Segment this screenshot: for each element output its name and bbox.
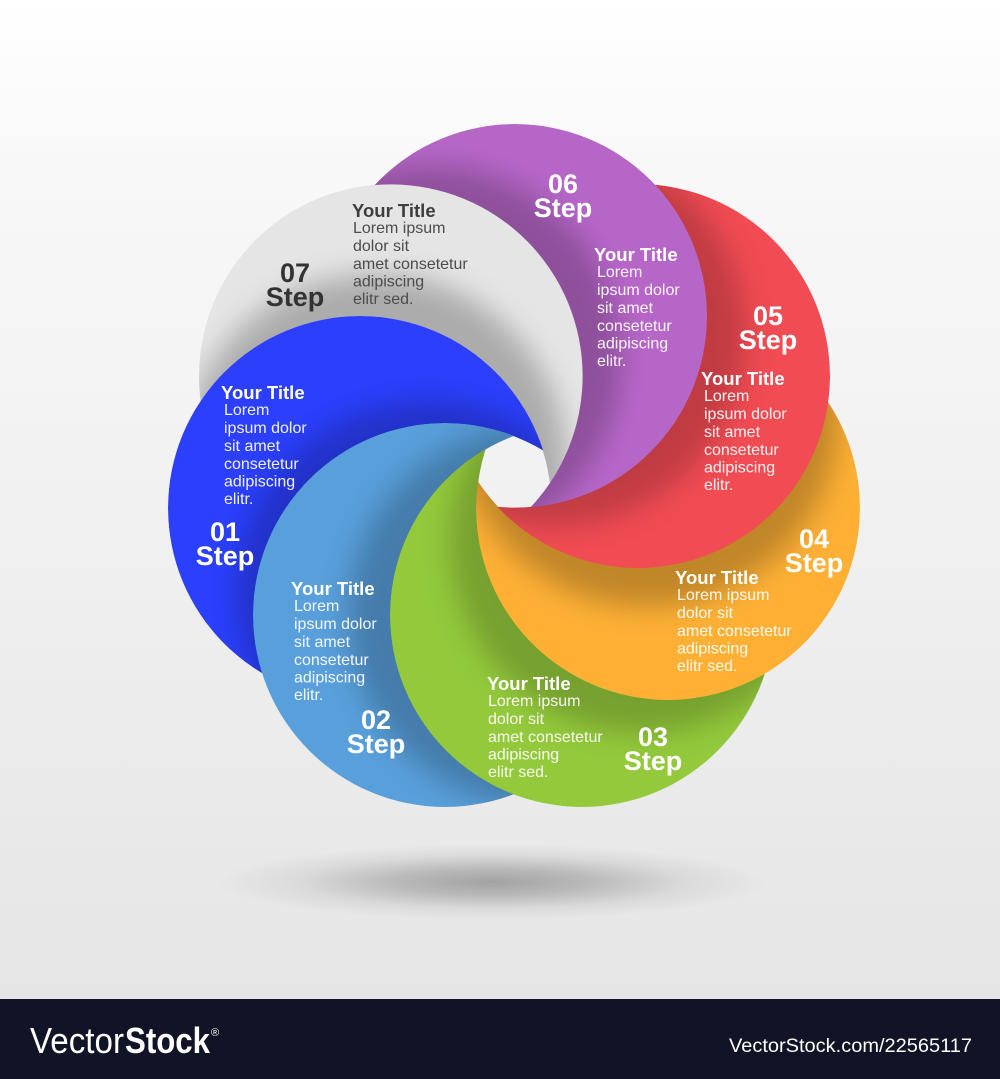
body text 06: adipiscing	[597, 336, 668, 352]
crescent: blue	[168, 316, 543, 674]
panel: step 02	[253, 423, 514, 807]
body text 02: Lorem	[294, 598, 339, 615]
step number 03: Step	[624, 746, 682, 776]
body text 02: ipsum dolor	[294, 616, 377, 633]
ground shadow	[217, 844, 767, 920]
image id: VectorStock.com/22565117	[729, 1035, 972, 1057]
body text 05: adipiscing	[704, 460, 775, 476]
step number 06: Step	[534, 193, 592, 223]
crescent: grey	[199, 184, 582, 483]
panel: step 01	[168, 316, 543, 674]
body text 03: adipiscing	[488, 746, 559, 764]
body text 05: ipsum dolor	[704, 406, 787, 423]
body text 06: sit amet	[597, 300, 654, 317]
title 04: Your Title	[675, 567, 759, 588]
body text 07: dolor sit	[353, 238, 410, 255]
body text 01: ipsum dolor	[224, 420, 307, 437]
logo wordmark: Vector	[30, 1020, 124, 1061]
title 03: Your Title	[487, 673, 571, 694]
body text 07: amet consetetur	[353, 256, 468, 273]
body text 03: elitr sed.	[488, 764, 548, 781]
panel: step 06	[374, 124, 707, 508]
body text 04: adipiscing	[677, 640, 748, 658]
body text 03: dolor sit	[488, 711, 545, 728]
panel: step 03	[390, 449, 765, 807]
title 07: Your Title	[352, 200, 436, 221]
step number 05: 05	[753, 301, 783, 331]
body text 01: Lorem	[224, 402, 269, 419]
panel: step 07	[199, 184, 582, 483]
step number 03: 03	[638, 722, 668, 752]
body text 02: elitr.	[294, 687, 323, 704]
panel: step 04	[476, 402, 860, 700]
step number 06: 06	[548, 169, 578, 199]
body text 02: adipiscing	[294, 670, 365, 686]
body text 07: elitr sed.	[353, 291, 413, 308]
title 05: Your Title	[701, 368, 785, 389]
step number 02: 02	[361, 705, 391, 735]
body text 02: consetetur	[294, 652, 369, 669]
body text 05: sit amet	[704, 424, 761, 441]
body text 06: elitr.	[597, 353, 626, 370]
footer bar	[0, 999, 1000, 1079]
body text 03: amet consetetur	[488, 729, 603, 746]
step number 01: Step	[196, 541, 254, 571]
body text 04: elitr sed.	[677, 658, 737, 675]
body text 06: consetetur	[597, 318, 672, 335]
step number 04: 04	[799, 524, 829, 554]
crescent: light blue	[253, 423, 514, 807]
body text 07: adipiscing	[353, 274, 424, 290]
body text 05: consetetur	[704, 442, 779, 459]
body text 07: Lorem ipsum	[353, 220, 445, 237]
logo wordmark: ®	[211, 1027, 219, 1039]
step number 01: 01	[210, 517, 240, 547]
step number 04: Step	[785, 548, 843, 578]
step number 05: Step	[739, 325, 797, 355]
panel: step 05	[498, 184, 830, 568]
body text 06: Lorem	[597, 264, 642, 281]
body text 04: amet consetetur	[677, 623, 792, 640]
body text 05: elitr.	[704, 477, 733, 494]
body text 01: consetetur	[224, 456, 299, 473]
title 02: Your Title	[291, 578, 375, 599]
body text 01: sit amet	[224, 438, 281, 455]
body text 04: Lorem ipsum	[677, 587, 769, 604]
body text 03: Lorem ipsum	[488, 693, 580, 710]
body text 04: dolor sit	[677, 605, 734, 622]
body text 01: elitr.	[224, 491, 253, 508]
body text 06: ipsum dolor	[597, 282, 680, 299]
title 01: Your Title	[221, 382, 305, 403]
step number 02: Step	[347, 729, 405, 759]
crescent: orange	[476, 402, 860, 700]
body text 05: Lorem	[704, 388, 749, 405]
crescent: red	[498, 184, 830, 568]
crescent: purple	[374, 124, 707, 508]
crescent: green	[390, 449, 765, 807]
body text 02: sit amet	[294, 634, 351, 651]
step number 07: Step	[266, 282, 324, 312]
step number 07: 07	[280, 258, 310, 288]
logo wordmark: Stock	[125, 1020, 211, 1061]
title 06: Your Title	[594, 244, 678, 265]
body text 01: adipiscing	[224, 474, 295, 490]
